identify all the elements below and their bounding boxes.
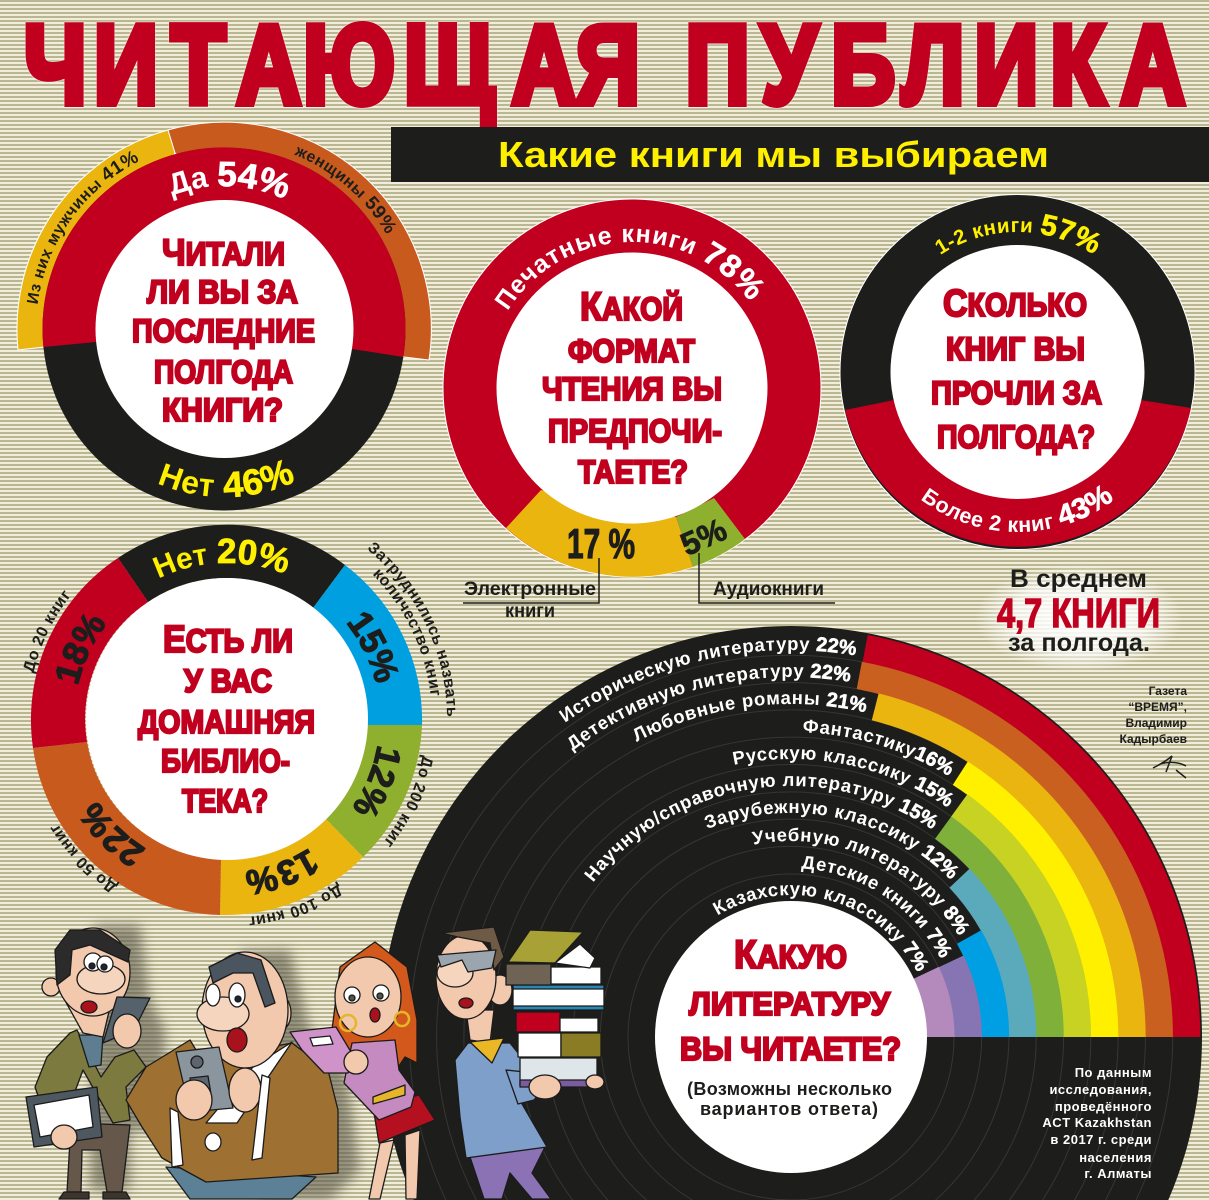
donut: how many books: [840, 194, 1196, 550]
average callout: 4,7 КНИГИ: [997, 590, 1160, 636]
callout: e-books: книги: [505, 601, 555, 622]
genre labels: Историческую литературу 22%: [558, 636, 856, 722]
segment: audiobooks: [676, 498, 745, 567]
books stack: [506, 930, 604, 1087]
label: women: женщины 59%: [294, 146, 396, 234]
genre labels: Любовные романы 21%: [634, 692, 866, 742]
genre labels: Зарубежную классику 12%: [704, 802, 958, 879]
centre: [96, 200, 354, 458]
question: У ВАС: [184, 663, 272, 699]
hair: [55, 930, 130, 985]
mouth: [227, 1028, 247, 1052]
source note: населения: [1079, 1150, 1152, 1165]
question: КАКОЙ: [580, 285, 683, 329]
trousers: [166, 1167, 316, 1199]
glasses: [437, 950, 496, 972]
black disc: [380, 626, 1202, 1200]
genre labels: Казахскую классику 7%: [712, 885, 928, 971]
earrings: [340, 1015, 356, 1031]
book red: [516, 1012, 560, 1032]
note: multiple answers: [687, 1079, 892, 1119]
label: no 20%: Нет 20%: [152, 538, 288, 578]
hand: [51, 1125, 77, 1149]
hand with phone: [113, 1014, 141, 1048]
shadow behind characters: [90, 925, 360, 1200]
hands: [176, 1080, 212, 1120]
cuffs: [170, 1075, 270, 1167]
question: ДОМАШНЯЯ: [138, 704, 315, 740]
shirt collar: [470, 1038, 504, 1063]
ear: [267, 995, 291, 1031]
average callout: за полгода.: [1008, 629, 1150, 657]
note: multiple answers: (Возможны несколько: [687, 1079, 892, 1099]
question: ПОСЛЕДНИЕ: [132, 313, 315, 349]
character: man with stack of books: [436, 927, 604, 1199]
outer label: up to 200: До 200 книг: [385, 754, 433, 848]
rainbow bands: [859, 649, 1186, 1037]
number: 17%: 17 %: [567, 520, 635, 567]
head: [436, 935, 496, 1019]
question: КАКУЮ: [734, 933, 847, 977]
credit: Кадырбаев: [1120, 732, 1187, 746]
genre labels: Русскую классику 15%: [732, 749, 954, 806]
source note: г. Алматы: [1084, 1166, 1152, 1181]
question: ТЕКА?: [182, 783, 268, 819]
question: СКОЛЬКО: [943, 283, 1087, 325]
source note: исследования,: [1049, 1082, 1152, 1097]
outer label: up to 100: До 100 книг: [250, 881, 342, 926]
eyes: [344, 987, 360, 1003]
callout: e-books: [463, 558, 599, 622]
segment: red: [845, 400, 1191, 547]
ear: [42, 978, 60, 996]
nose: [197, 997, 249, 1031]
book blue: [513, 985, 604, 1010]
ring red: [443, 199, 821, 577]
number: 5%: 5%: [675, 511, 732, 563]
white centre: [655, 901, 927, 1173]
number: 13%: 13%: [246, 848, 318, 895]
question: ЛИТЕРАТУРУ: [689, 986, 891, 1022]
scarf: [79, 1035, 103, 1067]
donut: home library: [24, 524, 456, 926]
note: multiple answers: вариантов ответа): [700, 1099, 878, 1119]
number: 18%: 18%: [56, 614, 105, 684]
average callout: [975, 564, 1183, 672]
genre labels: Детские книги 7%: [800, 856, 952, 958]
centre: [890, 245, 1144, 499]
grooves: [409, 655, 1173, 1200]
shirt: [206, 1042, 292, 1123]
genre labels: Фантастику16%: [804, 720, 954, 775]
credit: Газета: [1149, 684, 1187, 698]
head: [335, 957, 401, 1037]
blouse: [344, 1040, 415, 1120]
subtitle bar: Какие книги мы выбираем: [498, 134, 1049, 175]
button: [205, 1133, 221, 1151]
mouth: [459, 998, 473, 1008]
head: [56, 928, 130, 1016]
eyes: [206, 984, 220, 1006]
segment: 15 blue: [313, 565, 422, 725]
skirt: [373, 1095, 435, 1143]
question: ВЫ ЧИТАЕТЕ?: [680, 1031, 901, 1067]
label: printed: Печатные книги 78%: [494, 228, 764, 310]
character: large man with phone: [126, 952, 338, 1199]
pages: [555, 944, 595, 968]
number: 22%: 22%: [80, 802, 146, 866]
genre labels: Учебную литературу 8%: [751, 828, 970, 935]
ring black: [840, 194, 1195, 550]
question: ФОРМАТ: [568, 333, 695, 369]
source note: [1042, 1065, 1152, 1181]
legs: [369, 1130, 420, 1199]
credit: [1120, 684, 1187, 746]
title: ЧИТАЮЩАЯ ПУБЛИКА: [24, 4, 1185, 127]
open top book: [508, 930, 583, 963]
mouth: [81, 1001, 97, 1013]
subtitle bar: [391, 127, 1209, 182]
question: ЕСТЬ ЛИ: [163, 619, 293, 661]
hand: [344, 1050, 368, 1074]
source note: ACT Kazakhstan: [1042, 1115, 1152, 1130]
legs: [470, 1147, 551, 1199]
hair: [332, 942, 417, 1072]
character: woman with tablet: [290, 942, 435, 1199]
label: no: Нет 46%: [158, 460, 294, 498]
label: more than 2: Более 2 книг 43%: [921, 485, 1112, 532]
head: [202, 952, 288, 1068]
genre labels: Научную/справочную литературу 15%: [584, 776, 938, 882]
callout: e-books: Электронные: [464, 579, 596, 600]
nose: [437, 959, 473, 987]
question: ЧТЕНИЯ ВЫ: [542, 371, 722, 407]
record chart: literature genres: [388, 626, 1202, 1200]
nose: [77, 964, 125, 994]
ring black: [42, 148, 406, 510]
source note: в 2017 г. среди: [1050, 1132, 1152, 1147]
source note: По данным: [1075, 1065, 1152, 1080]
hair: [209, 953, 275, 1007]
question: [132, 232, 315, 428]
sleeve: [506, 1070, 550, 1104]
question: КНИГ ВЫ: [946, 331, 1085, 367]
character: man with phone: [26, 928, 150, 1199]
book brown: [506, 964, 551, 985]
tablet: [26, 1087, 102, 1147]
centre: [496, 252, 768, 524]
question: ПРОЧЛИ ЗА: [931, 375, 1102, 411]
donut: read in last six months: [16, 122, 432, 510]
donut: reading format: [442, 198, 835, 622]
outer segment: men: [17, 130, 175, 350]
source note: проведённого: [1055, 1099, 1152, 1114]
credit: “ВРЕМЯ”,: [1128, 700, 1187, 714]
outer segment: women: [168, 122, 431, 360]
label: yes: Да 54%: [171, 162, 288, 201]
question: БИБЛИО-: [161, 743, 290, 779]
number: 15%: 15%: [346, 612, 399, 683]
phone: [103, 997, 150, 1043]
callout: audiobooks: [699, 553, 835, 603]
question: ЧИТАЛИ: [162, 232, 285, 273]
number: 12%: 12%: [354, 746, 400, 817]
ear: [488, 975, 512, 1005]
question: ТАЕТЕ?: [578, 454, 688, 490]
question: ПРЕДПОЧИ-: [548, 413, 722, 449]
book olive: [518, 1033, 561, 1057]
ring red: [42, 147, 405, 357]
centre: [86, 578, 368, 860]
neck: [63, 997, 111, 1037]
label: 1-2 books: 1-2 книги 57%: [935, 214, 1100, 254]
bottom book: [520, 1058, 597, 1085]
question: [542, 285, 722, 490]
question: [931, 283, 1102, 455]
segment: 13 amber: [220, 818, 363, 915]
segment: 18 red: [31, 558, 148, 748]
hair: [441, 927, 504, 970]
genre labels: [558, 636, 970, 971]
outer label: up to 20: До 20 книг: [24, 590, 70, 674]
question: ЛИ ВЫ ЗА: [147, 274, 298, 310]
hands: [529, 1075, 561, 1099]
credit: Владимир: [1125, 716, 1187, 730]
question: [138, 619, 315, 819]
segment: 22 orange: [33, 742, 221, 915]
mouth: [370, 1008, 380, 1022]
neck: [466, 1010, 494, 1043]
callout: audiobooks: Аудиокниги: [713, 579, 824, 600]
phone: [176, 1047, 233, 1112]
segment: no: [118, 525, 345, 608]
segment: 12 green: [325, 725, 422, 857]
signature: [1153, 756, 1186, 778]
question: ПОЛГОДА: [154, 354, 293, 390]
genre labels: Детективную литературу 22%: [568, 664, 850, 754]
question: ПОЛГОДА?: [937, 419, 1095, 455]
jacket: [455, 1043, 547, 1158]
average callout: В среднем: [1010, 565, 1147, 593]
jacket: [126, 1040, 338, 1182]
outer label: difficult line 1: Затруднились назвать: [368, 542, 456, 716]
tablet: [290, 1027, 354, 1073]
jacket: [35, 1030, 146, 1123]
legs: [67, 1123, 130, 1192]
eyes: [84, 953, 102, 971]
belt: [373, 1085, 405, 1104]
outer label: difficult line 2: количество книг: [373, 569, 440, 696]
segment: e-books: [506, 490, 693, 577]
question: КНИГИ?: [162, 392, 283, 428]
shoes: [59, 1192, 130, 1199]
question: [680, 933, 901, 1067]
label: men: Из них мужчины 41%: [26, 150, 138, 304]
outer label: up to 50: До 50 книг: [50, 826, 120, 892]
